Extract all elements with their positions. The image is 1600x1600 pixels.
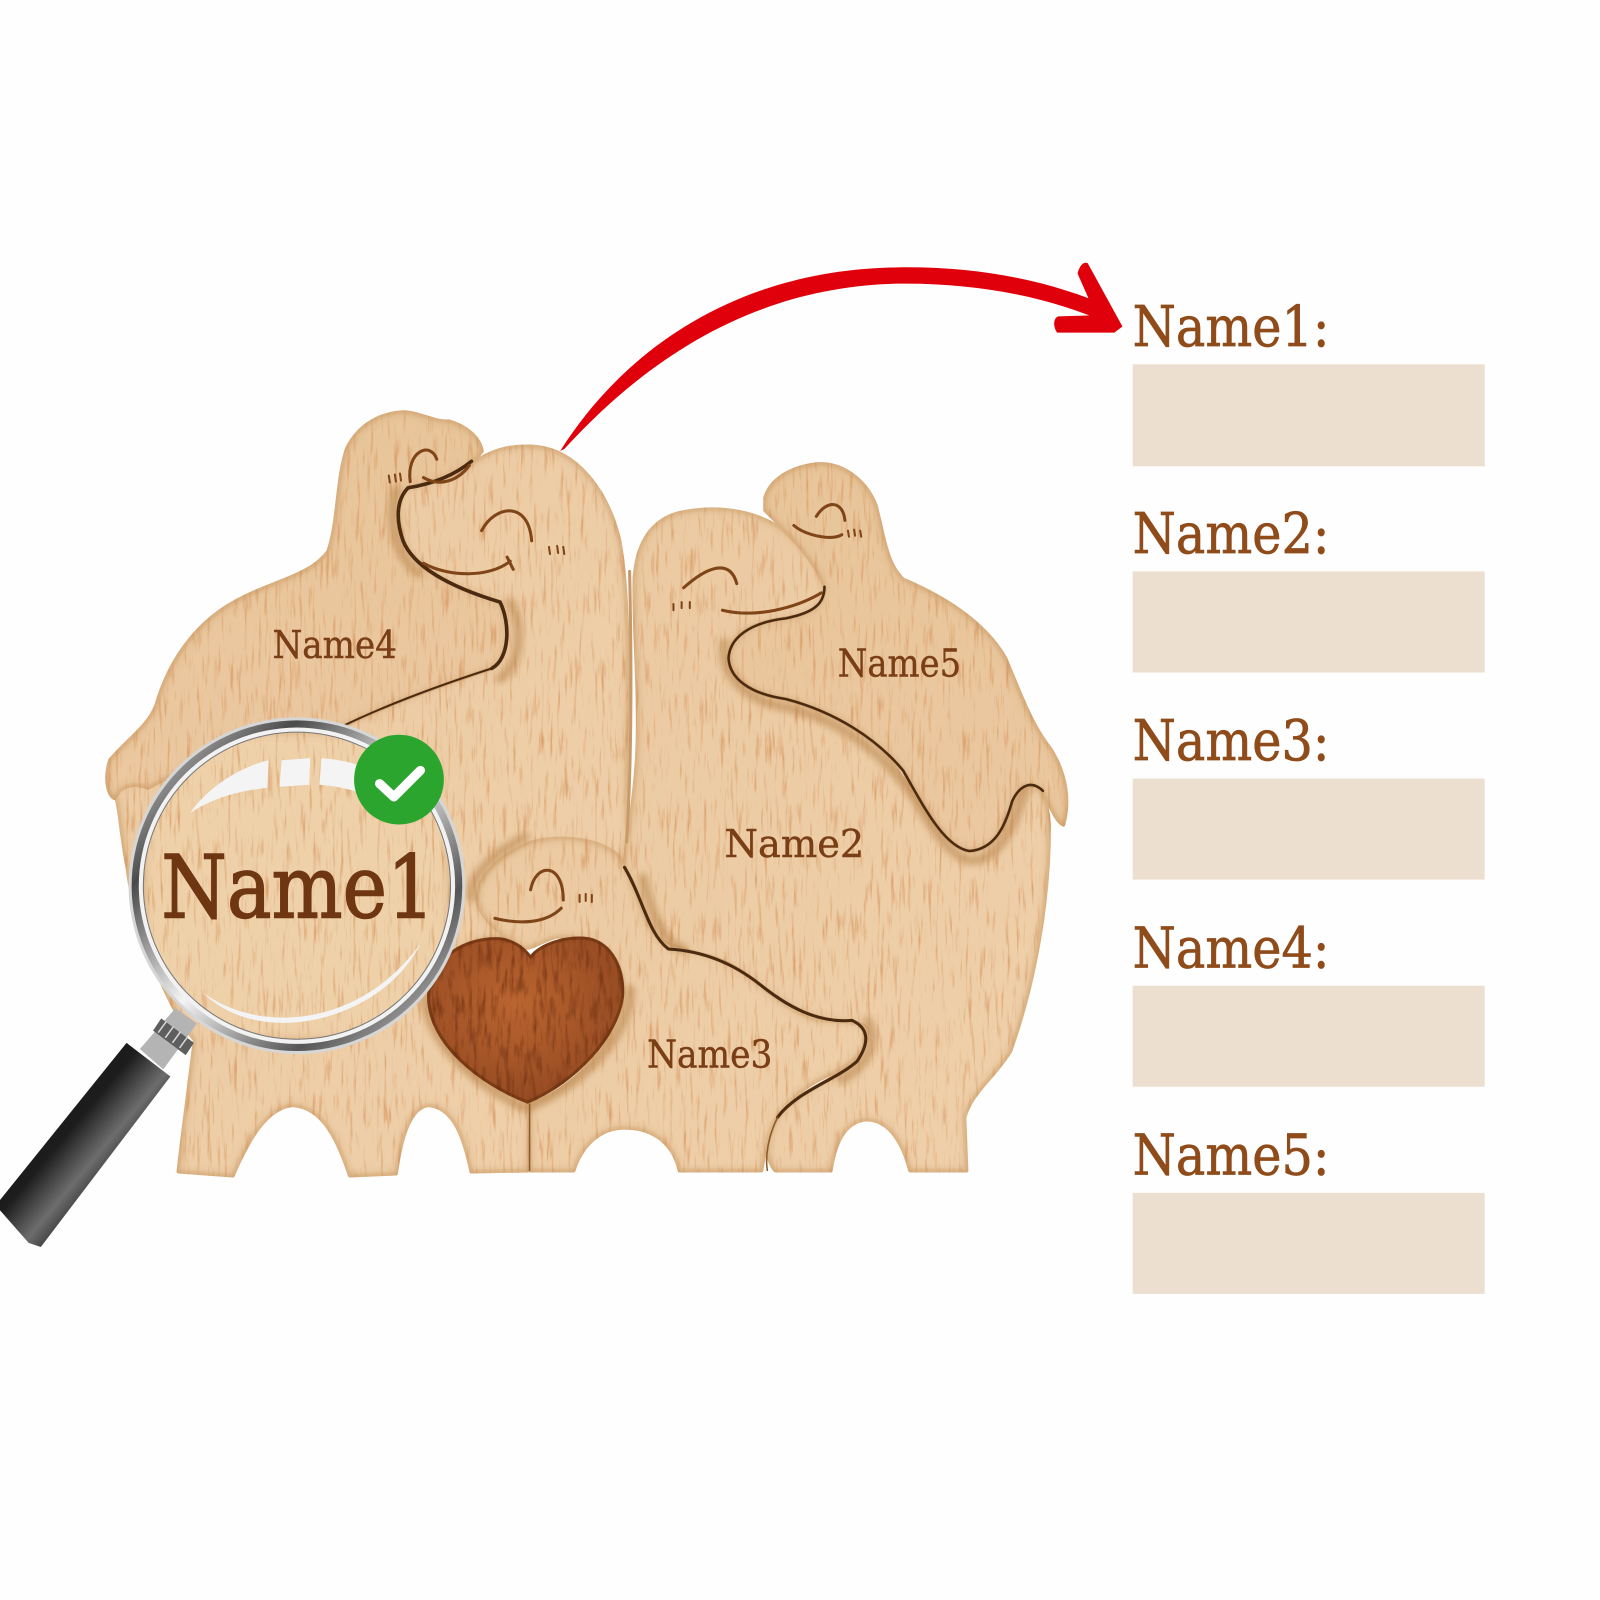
soft carved shading beside seams <box>393 490 1026 1108</box>
field: Name3: Name3: <box>1133 709 1330 774</box>
puzzle piece: Name4 animal on back <box>107 412 507 798</box>
field: Name1: Name1: <box>1133 295 1330 360</box>
field: Name1 <box>1133 295 1485 466</box>
magnified label: Name1: Name1 <box>161 837 435 938</box>
field: Name5 <box>1133 1123 1485 1294</box>
field: Name5: Name5: <box>1133 1123 1330 1188</box>
black handle <box>0 1043 170 1247</box>
lens with magnified wood <box>143 731 451 1041</box>
engraved label: Name4: Name4 <box>272 623 397 668</box>
engraved label: Name3: Name3 <box>647 1032 772 1077</box>
name entry list <box>1133 295 1485 1294</box>
puzzle piece: Name1 large left animal <box>114 447 631 1176</box>
face: Name2 <box>673 568 821 613</box>
lens highlights <box>190 758 420 1023</box>
dark seams between pieces <box>342 461 1043 1170</box>
engraved label: Name2: Name2 <box>724 822 864 867</box>
puzzle piece: Name5 animal on back <box>729 464 1066 851</box>
face: Name4 <box>389 450 469 483</box>
field: Name2 <box>1133 502 1485 672</box>
face: Name3 <box>495 870 592 922</box>
puzzle piece: Name2 large right animal <box>624 509 1049 1170</box>
engraved label: Name5: Name5 <box>838 642 961 687</box>
red curved arrow <box>560 263 1122 451</box>
silver ring <box>129 717 465 1054</box>
puzzle piece: Name3 baby animal <box>478 839 868 1170</box>
magnifying glass <box>0 717 465 1247</box>
handle neck <box>140 1008 197 1069</box>
field: Name4 <box>1133 916 1485 1087</box>
wooden elephant family puzzle <box>107 412 1066 1176</box>
face: Name5 <box>794 505 861 537</box>
field: Name3 <box>1133 709 1485 880</box>
face: Name1 <box>423 511 564 574</box>
puzzle piece: dark wood heart <box>429 938 623 1102</box>
green check badge <box>354 735 444 824</box>
field: Name2: Name2: <box>1133 502 1330 567</box>
field: Name4: Name4: <box>1133 916 1330 981</box>
carved faces <box>389 450 861 922</box>
